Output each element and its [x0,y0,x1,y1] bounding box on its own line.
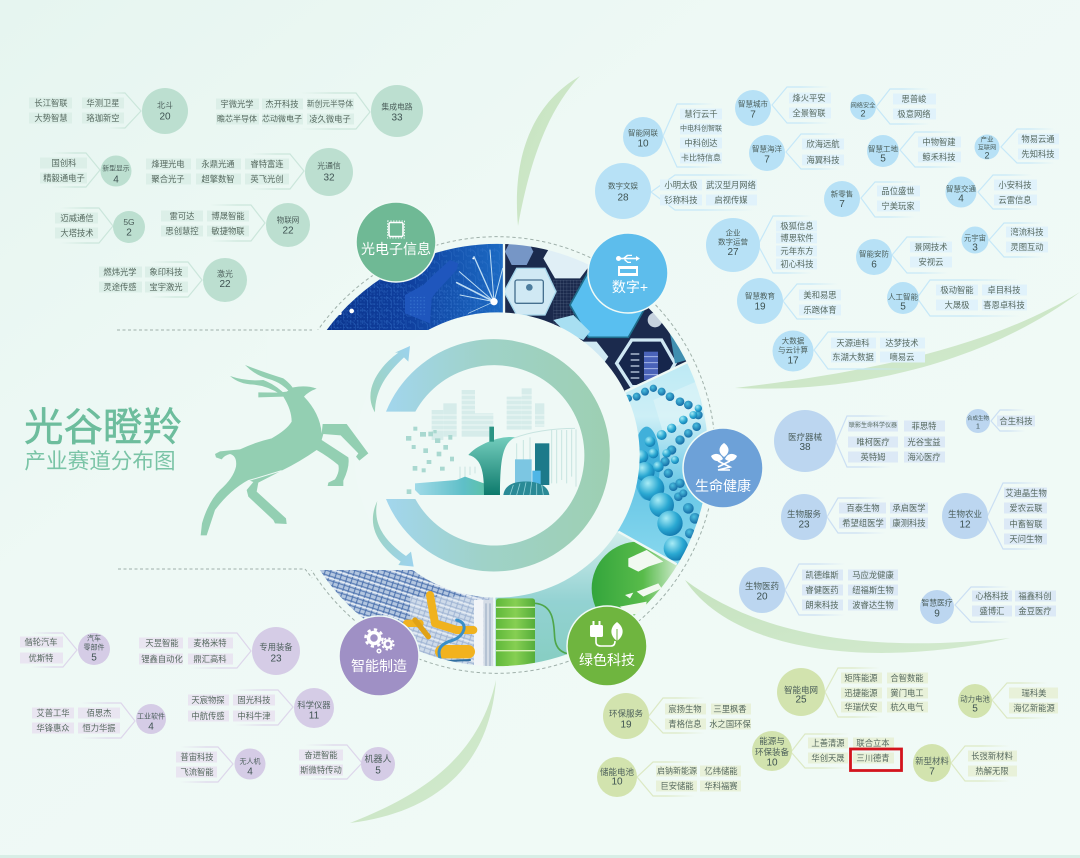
node: 北斗: 长江智联 [34,98,68,108]
node: 能源与环保装备 [752,731,894,771]
node: 智能网联: 卡比特信息 [681,152,721,162]
node: 智慧城市: 全景智联 [792,108,826,118]
node: 人工智能: 喜恩卓科技 [983,300,1025,310]
node: 工业软件: 恒力华振 [82,723,116,733]
node: 智慧交通: 4 [958,194,964,204]
node: 生物农业: 艾迪晶生物 [1005,488,1047,498]
node: 环保服务: 青格信息 [668,719,702,729]
node: 集成电路: 杰开科技 [265,99,299,109]
node: 企业数字运营: 元年东方 [780,246,814,256]
node: 专用装备: 锂鑫自动化 [141,654,183,664]
node: 储能电池: 启钠新能源 [657,766,697,776]
node: 生物服务: 23 [798,520,810,530]
node: 储能电池 [597,757,741,797]
node: 科学仪器: 固光科技 [237,695,271,705]
node: 能源与环保装备: 华创天晟 [811,753,845,763]
node: 激光: 22 [219,279,231,290]
node: 产业互联网: 2 [984,150,990,160]
node: 汽车零部件: 汽车 [87,634,101,642]
node: 生物医药: 生物医药 [745,581,779,591]
node: 汽车零部件: 偕轮汽车 [24,637,58,647]
node: 环保服务: 宸扬生物 [668,704,702,714]
node: 产业互联网: 互联网 [978,144,996,152]
node: 新零售: 7 [839,199,845,210]
node: 元宇宙: 灵图互动 [1010,242,1044,252]
node: 大数据与云计算: 天源迪科 [836,338,870,348]
node: 物联网 [161,203,310,247]
node: 生物农业 [942,483,1047,549]
node: 生物医药: 马应龙健康 [852,570,894,580]
node: 工业软件: 佰思杰 [87,708,111,718]
node: 科学仪器: 科学仪器 [297,700,331,710]
node: 储能电池: 10 [611,776,623,788]
node: 环保服务: 19 [620,720,632,730]
node: 光通信: 烽理光电 [151,159,185,169]
node: 能源与环保装备: 环保装备 [755,747,789,757]
node: 生物服务 [781,494,928,540]
node: 合成生物: 1 [976,424,980,430]
hub: 数字+: 数字+ [612,279,648,295]
node: 物联网: 博晟智能 [211,211,245,221]
node: 智能网联: 慧行云千 [684,109,718,119]
node: 生物服务: 康测科技 [892,518,926,528]
node: 科学仪器: 中航传感 [191,711,225,721]
node: 北斗: 20 [159,112,171,122]
node: 智能安防: 安视云 [919,257,943,267]
image: circuit board [326,244,503,330]
node: 生物农业: 12 [959,520,971,530]
node: 机器人: 奋进智能 [304,750,338,760]
image: digital hexagons [505,244,686,392]
hub: 数字+ [588,233,668,313]
node: 医疗器械: 医疗器械 [788,432,822,442]
node: 能源与环保装备: 能源与 [759,736,785,746]
node: 动力电池: 海亿新能源 [1013,703,1055,713]
node: 大数据与云计算: 东湖大数据 [832,352,874,362]
arrow: lower curved [373,501,414,567]
city illustration [406,388,576,495]
node: 科学仪器: 中科牛津 [237,711,271,721]
node: 集成电路: 新创元半导体 [307,98,353,108]
sector separators [285,240,709,670]
node: 数字文娱: 武汉型月网络 [706,180,756,190]
node: 智慧城市: 智慧城市 [738,98,768,108]
node: 新型材料: 热解无限 [975,766,1009,776]
node: 元宇宙 [962,223,1048,257]
node: 激光: 灵途传感 [103,282,137,292]
node: 智慧教育: 19 [754,302,766,312]
node: 智慧教育 [737,278,841,324]
node: 新零售: 品位盛世 [881,186,915,196]
node: 激光: 宝宇激光 [149,282,183,292]
panel: 智能制造 [20,616,419,782]
node: 智慧海洋 [749,134,844,171]
node: 元宇宙: 元宇宙 [964,234,986,242]
node: 生物服务: 希望组医学 [842,518,884,528]
node: 生物农业: 爱农云联 [1009,503,1043,513]
hub: 生命健康 [683,428,763,508]
node: 储能电池: 华科福赛 [704,781,738,791]
node: 人工智能: 5 [900,302,906,312]
node: 大数据与云计算: 嘀易云 [890,352,914,362]
node: 储能电池: 储能电池 [600,767,634,777]
node: 工业软件: 工业软件 [137,712,165,720]
node: 无人机: 无人机 [240,756,260,766]
panel: 光电子信息 [29,85,436,302]
node: 智慧医疗: 智慧医疗 [921,598,953,608]
node: 大数据与云计算 [772,330,925,372]
node: 新型材料: 新型材料 [915,756,949,766]
node: 智慧海洋: 7 [764,154,770,166]
node: 智能网联: 10 [637,138,649,150]
node: 5G: 2 [126,228,132,238]
node: 生物农业: 生物农业 [948,509,982,519]
node: 集成电路: 凌久微电子 [309,114,351,124]
node: 环保服务 [603,693,751,739]
node: 集成电路: 33 [391,112,403,124]
node: 数字文娱: 钐称科技 [664,195,698,205]
node: 工业软件 [32,703,166,738]
node: 新型显示 [40,153,132,187]
node: 汽车零部件 [20,633,110,667]
node: 数字文娱: 数字文娱 [608,180,638,190]
node: 智慧教育: 美和易思 [803,290,837,300]
node: 汽车零部件: 5 [91,652,97,664]
node: 智慧医疗: 盛博汇 [980,606,1004,616]
node: 企业数字运营: 27 [727,247,739,258]
node: 动力电池 [958,683,1058,718]
hub: 绿色科技: 绿色科技 [579,652,635,668]
node: 北斗: 珞珈新空 [86,113,120,123]
node: 人工智能: 极动智能 [940,285,974,295]
node: 企业数字运营: 企业 [726,228,741,238]
callout: highlight box [850,749,902,770]
panel: 数字+ [588,87,1059,372]
node: 储能电池: 巨安储能 [660,781,694,791]
node: 激光 [99,258,247,302]
node: 专用装备: 麦格米特 [193,638,227,648]
node: 新型材料 [913,744,1017,782]
node: 生物医药 [739,564,898,615]
node: 能源与环保装备: 三川德青 [856,753,890,763]
node: 光通信: 英飞光创 [250,174,284,184]
node: 机器人: 机器人 [364,753,392,764]
node: 合成生物: 合成生物 [967,414,989,422]
node: 无人机: 4 [247,766,253,778]
node: 人工智能 [887,280,1027,316]
node: 人工智能: 大晟极 [945,300,970,310]
node: 人工智能: 人工智能 [888,292,919,302]
panel: 生命健康 [683,409,1056,624]
node: 光通信: 睿特富连 [250,159,284,169]
node: 集成电路 [216,85,423,137]
node: 企业数字运营: 博思软件 [780,233,814,243]
node: 汽车零部件: 零部件 [84,642,104,652]
node: 网络安全 [850,89,936,124]
node: 智慧海洋: 智慧海洋 [752,144,782,154]
node: 新型显示: 国创科 [52,158,76,168]
node: 企业数字运营: 极狐信息 [780,221,814,231]
node: 新零售 [824,181,920,217]
node: 物联网: 雷可达 [170,211,194,221]
node: 产业互联网 [974,129,1059,163]
icon: gears [366,630,394,653]
node: 数字文娱: 启视传媒 [714,195,748,205]
node: 新零售: 宁美玩家 [881,201,915,211]
node: 环保服务: 环保服务 [609,708,643,718]
node: 储能电池: 亿纬储能 [704,766,738,776]
node: 能源与环保装备: 10 [766,758,778,768]
node: 大数据与云计算: 达梦技术 [885,338,919,348]
progress ring [386,339,610,571]
node: 智能电网: 迅捷能源 [844,688,878,698]
node: 人工智能: 卓目科技 [987,285,1021,295]
node: 机器人: 5 [375,766,381,776]
node: 大数据与云计算: 大数据 [782,336,805,346]
node: 专用装备: 23 [270,654,282,664]
icon: plant dna [711,443,737,470]
node: 合成生物: 合生科技 [999,416,1033,426]
subheading: 产业赛道分布图 [24,448,176,474]
node: 智能电网: 智能电网 [784,685,818,695]
node: 智慧海洋: 海翼科技 [806,155,840,165]
dashed orbit [279,237,715,673]
node: 北斗: 大势智慧 [34,113,68,123]
node: 生物医药: 20 [756,592,768,602]
node: 智能网联: 中科创达 [684,138,718,148]
panel: 绿色科技 [567,606,1058,797]
node: 智慧工地: 5 [880,154,886,164]
node: 网络安全: 2 [860,108,866,118]
node: 智能电网: 合智数能 [890,673,924,683]
node: 专用装备: 专用装备 [259,642,293,652]
node: 生物服务: 百泰生物 [846,503,880,513]
image: factory robot [320,570,494,666]
node: 5G [55,208,145,243]
node: 智能网联 [623,104,722,167]
node: 智慧交通: 云雷信息 [998,195,1032,205]
node: 生物医药: 纽福斯生物 [852,585,894,595]
node: 智能安防 [856,237,952,275]
node: 医疗器械: 海沁医疗 [907,452,941,462]
node: 智能网联: 中电科创智联 [680,124,722,132]
node: 智能安防: 6 [871,260,877,270]
node: 科学仪器: 11 [309,710,320,722]
node: 激光: 燃炜光学 [103,267,137,277]
node: 光通信: 聚合光子 [151,174,185,184]
node: 大数据与云计算: 与云计算 [778,344,808,354]
node: 专用装备 [139,627,300,675]
node: 生物医药: 睿健医药 [805,585,839,595]
node: 物联网: 22 [282,226,294,236]
node: 科学仪器: 天宸物探 [191,695,225,705]
node: 网络安全: 极意网络 [897,109,931,119]
icon: chip [388,221,404,238]
node: 能源与环保装备: 联合立本 [856,738,890,748]
icon: usb [616,255,640,276]
node: 医疗器械 [774,410,945,472]
node: 无人机 [176,747,266,782]
node: 新型材料: 7 [929,766,935,778]
node: 网络安全: 网络安全 [851,102,876,110]
node: 智慧交通: 小安科技 [998,180,1032,190]
node: 智能网联: 智能网联 [628,128,658,138]
node: 元宇宙: 3 [972,242,978,254]
node: 能源与环保装备: 上善清源 [811,738,845,748]
node: 智慧医疗: 福鑫科创 [1018,591,1052,601]
node: 集成电路: 瞻芯半导体 [217,114,257,124]
node: 物联网: 敏捷物联 [211,226,245,236]
node: 5G: 大塔技术 [60,228,94,238]
node: 医疗器械: 英特姆 [861,452,885,462]
node: 专用装备: 天昱智能 [145,638,179,648]
hub: 光电子信息: 光电子信息 [361,241,431,257]
node: 网络安全: 思普峻 [902,94,927,104]
node: 5G: 5G [123,217,135,227]
node: 元宇宙: 湾流科技 [1010,227,1044,237]
node: 生物医药: 朗来科技 [805,600,839,610]
node: 智慧工地: 鲸禾科技 [922,152,956,162]
node: 北斗 [29,88,188,134]
node: 工业软件: 艾普工华 [36,708,70,718]
node: 产业互联网: 产业 [980,134,994,144]
node: 科学仪器 [188,688,334,728]
image ring sectors [283,233,733,677]
node: 光通信: 永鼎光通 [201,159,235,169]
hub: 智能制造: 智能制造 [351,658,407,674]
node: 智慧医疗: 金豆医疗 [1018,606,1052,616]
icon: gazelle [201,365,368,535]
node: 动力电池: 动力电池 [960,694,990,704]
node: 医疗器械: 38 [799,442,811,453]
node: 光通信: 超擎数智 [201,174,235,184]
inner disc cover [267,330,497,570]
node: 光通信: 光通信 [317,160,341,170]
node: 生物服务: 承启医学 [892,503,926,513]
node: 物联网: 物联网 [277,214,299,224]
node: 数字文娱: 小明太极 [664,180,698,190]
node: 环保服务: 三里枫香 [713,704,747,714]
node: 智能电网: 25 [795,694,807,706]
node: 智慧城市 [735,87,831,126]
node: 机器人 [299,745,395,781]
node: 智慧海洋: 欣海远航 [806,139,840,149]
node: 医疗器械: 光谷宝益 [907,437,941,447]
node: 医疗器械: 联影生命科学仪器 [849,421,897,429]
node: 数字文娱 [595,163,757,219]
node: 生物农业: 天问生物 [1009,534,1043,544]
node: 集成电路: 芯动微电子 [262,114,302,124]
node: 智能电网: 黉门电工 [890,688,924,698]
node: 汽车零部件: 优斯特 [29,653,53,663]
node: 智慧城市: 7 [750,110,756,120]
node: 医疗器械: 菲思特 [912,421,936,431]
node: 智慧医疗: 9 [934,608,940,620]
node: 集成电路: 宇微光学 [220,99,254,109]
icon: plug and leaf [590,621,623,646]
node: 智能安防: 智能安防 [859,248,889,258]
node: 集成电路: 集成电路 [381,102,413,112]
node: 智慧城市: 烽火平安 [792,93,826,103]
node: 工业软件: 4 [148,722,154,732]
heading: 光谷瞪羚 [24,406,182,450]
node: 医疗器械: 唯柯医疗 [856,437,890,447]
node: 智慧工地: 中物智建 [922,137,956,147]
node: 智慧医疗: 心格科技 [975,591,1009,601]
node: 新型显示: 精毅通电子 [43,173,85,183]
node: 新零售: 新零售 [831,188,853,198]
hub: 绿色科技 [567,606,647,686]
node: 新型显示: 4 [113,174,119,186]
hub: 生命健康: 生命健康 [695,478,751,494]
node: 动力电池: 瑞科美 [1022,688,1046,698]
node: 物联网: 思创慧控 [165,226,199,236]
node: 企业数字运营 [706,216,817,273]
node: 智能电网: 华瑞伏安 [844,702,878,712]
node: 专用装备: 鼎汇高科 [193,654,227,664]
node: 无人机: 飞流智能 [180,767,214,777]
title block [24,406,182,474]
node: 智能电网: 矩阵能源 [844,673,878,683]
node: 智能电网: 杭久电气 [890,702,924,712]
node: 激光: 激光 [217,268,233,278]
node: 企业数字运营: 数字运营 [718,236,748,246]
node: 智慧教育: 智慧教育 [745,290,775,300]
node: 新型显示: 新型显示 [102,164,130,172]
node: 光通信: 32 [323,172,335,184]
node: 生物医药: 波睿达生物 [852,600,894,610]
image: globe and battery [496,531,678,666]
node: 智能安防: 景网技术 [914,242,948,252]
node: 智慧交通: 智慧交通 [946,184,976,194]
node: 大数据与云计算: 17 [787,356,799,366]
image: DNA spheres [618,364,707,564]
node: 合成生物 [966,409,1035,433]
node: 新型材料: 长弢新材料 [971,751,1013,761]
node: 智慧工地: 智慧工地 [868,144,898,154]
node: 数字文娱: 28 [617,192,629,204]
node: 生物服务: 生物服务 [787,509,821,519]
node: 北斗: 华测卫星 [86,98,120,108]
node: 生物农业: 中畜智联 [1009,519,1043,529]
node: 智慧教育: 乐跑体育 [803,305,837,315]
node: 光通信 [146,148,353,196]
node: 产业互联网: 先知科技 [1021,149,1055,159]
node: 智慧医疗 [920,587,1056,624]
node: 北斗: 北斗 [157,101,173,110]
node: 机器人: 斯微特传动 [300,765,342,775]
node: 激光: 象印科技 [149,267,183,277]
decorative swooshes [350,76,1080,823]
hub: 光电子信息 [356,202,436,282]
arrow: upper curved [370,346,410,412]
node: 工业软件: 华锋惠众 [36,723,70,733]
node: 动力电池: 5 [972,704,978,714]
node: 企业数字运营: 初心科技 [780,259,814,269]
node: 无人机: 普宙科技 [180,752,214,762]
node: 智慧交通 [946,175,1037,209]
node: 智能电网 [777,668,928,717]
node: 5G: 迈威通信 [60,213,94,223]
node: 智慧工地 [867,132,961,167]
node: 生物医药: 凯德维斯 [805,570,839,580]
dashed leader lines [117,330,312,578]
node: 产业互联网: 物易云通 [1021,134,1055,144]
hub: 智能制造 [339,616,419,696]
node: 环保服务: 水之国环保 [709,719,751,729]
central wheel [311,236,714,674]
